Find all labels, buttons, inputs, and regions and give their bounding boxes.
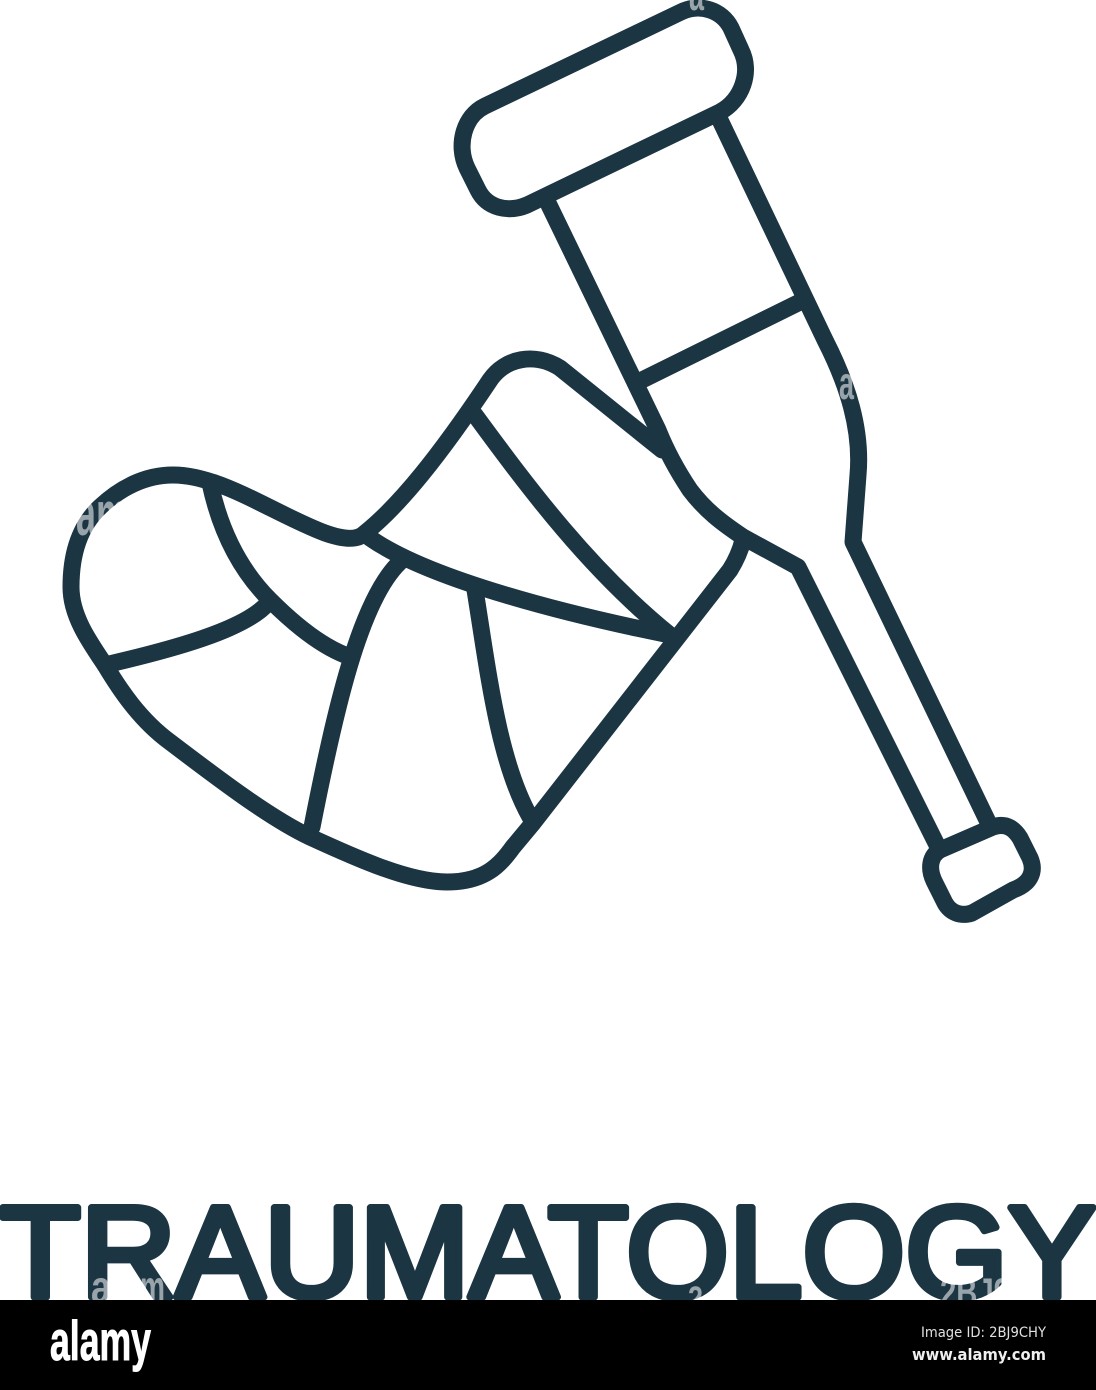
cast outline <box>71 359 743 882</box>
icon: crutch <box>462 8 1032 914</box>
title: TRAUMATOLOGY <box>0 1179 1096 1325</box>
footer image id: Image ID: 2BJ9CHY <box>921 1325 1046 1341</box>
crutch armpit pad <box>462 8 745 209</box>
crutch rubber tip <box>931 825 1032 914</box>
watermark fragments: 2 <box>688 1280 703 1318</box>
watermark fragments: a <box>91 1261 111 1313</box>
icon: leg in cast <box>71 359 743 882</box>
watermark fragments: m <box>140 1261 165 1313</box>
cast bandage lines <box>210 483 345 655</box>
footer url: www.alamy.com <box>912 1345 1046 1364</box>
crutch right rail <box>719 118 988 822</box>
footer bar <box>0 1300 1096 1390</box>
watermark fragments: 2BJ9 <box>940 1271 1010 1315</box>
footer logo: alamy <box>50 1309 151 1372</box>
watermark fragments: am <box>76 480 128 549</box>
crutch left rail <box>549 205 937 845</box>
watermark fragments: a <box>839 357 854 409</box>
crutch cross band <box>640 302 800 381</box>
